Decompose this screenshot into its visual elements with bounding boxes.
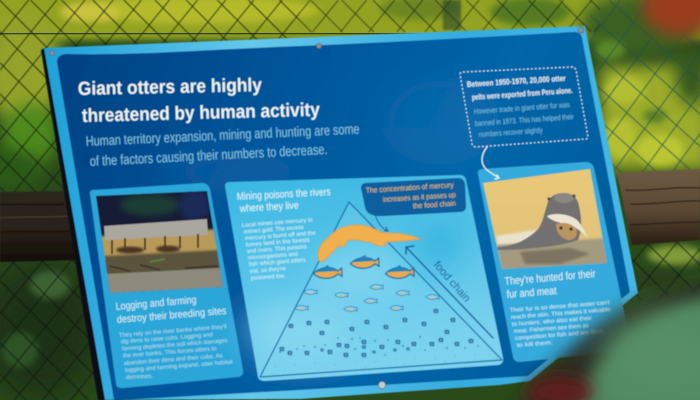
panel body text: mercury is burnt off and the <box>245 230 316 242</box>
panel body text: poisoned too. <box>251 273 286 282</box>
label: food chain: food chain <box>431 259 473 305</box>
callout: dotted fact box: numbers recover slightly <box>479 126 543 139</box>
subtitle: Human territory expansion, mining and hunting are some <box>85 121 360 149</box>
panel heading <box>237 186 331 215</box>
arrow: callout to otter <box>375 212 388 231</box>
panel body text: abandon their dens and their cubs. As <box>124 353 223 367</box>
panel heading: They're hunted for their <box>504 268 596 288</box>
foreground: blurred green leaf, bottom right <box>515 280 700 400</box>
title: Giant otters are highly <box>78 75 262 100</box>
panel heading: destroy their breeding sites <box>116 305 227 326</box>
panel body text: Local mines use mercury to <box>242 217 313 229</box>
callout: mercury concentration <box>361 178 466 216</box>
small fish and organisms <box>274 309 491 371</box>
wooden log rail: left <box>0 191 78 262</box>
panel heading: where they live <box>239 199 299 215</box>
callout: dotted fact box: However trade in giant otter fur was <box>473 100 570 116</box>
panel body text: and rivers. This poisons <box>247 244 307 255</box>
title: threatened by human activity <box>82 100 320 127</box>
information sign <box>41 26 638 400</box>
sign inner blue field <box>57 32 630 400</box>
panel body text <box>242 217 316 282</box>
panel heading <box>115 294 227 326</box>
otter on top of pyramid <box>318 225 421 262</box>
panel: hunted for fur and meat <box>478 162 632 362</box>
panel body text: fish which giant otters <box>249 258 306 268</box>
sign field lighting <box>160 75 500 192</box>
panel body text: decreases. <box>126 374 153 381</box>
sign outer border <box>44 26 638 400</box>
foreground: blurred red leaf, top right <box>642 0 700 36</box>
panel heading: Mining poisons the rivers <box>237 186 331 203</box>
panel body text: meat. Fishermen see them as <box>514 323 589 335</box>
panel body text <box>510 300 611 349</box>
photo: river bank shelter <box>96 190 224 294</box>
food chain pyramid <box>260 202 502 377</box>
panel body text: reach the skin. This makes it valuable <box>511 307 611 321</box>
sign black edge <box>41 47 108 400</box>
panel body text: Their fur is so dense that water can't <box>510 300 610 314</box>
panel body text <box>119 324 233 381</box>
subtitle: of the factors causing their numbers to decrease. <box>89 141 328 169</box>
callout: dotted fact box <box>460 67 588 147</box>
panel body text: to kill them. <box>517 340 554 349</box>
sign screws <box>49 27 584 389</box>
arrow: food chain <box>406 246 493 338</box>
callout: mercury concentration: the food chain <box>413 199 456 210</box>
wooden log rail: right <box>617 169 700 245</box>
callout: dotted fact box: banned in 1973. This has helped their <box>475 112 574 128</box>
callout: mercury concentration: The concentration of mercury <box>366 180 454 195</box>
title <box>78 75 320 127</box>
medium fish <box>295 285 439 311</box>
panel body text: microorganisms and <box>248 252 298 261</box>
panel body text: extract gold. The excess <box>244 225 304 235</box>
panel body text: eat, so they're <box>250 266 286 275</box>
panel body text: to hunters, who also eat their <box>512 316 592 328</box>
panel: logging and farming <box>90 183 243 388</box>
subtitle <box>85 121 360 169</box>
panel body text: dig dens to raise cubs. Logging and <box>121 332 213 345</box>
panel heading: Logging and farming <box>115 294 197 313</box>
panel body text: logging and farming expand, otter habitat <box>125 360 233 374</box>
callout: dotted fact box: Between 1950-1970, 20,000 otter <box>467 74 566 89</box>
panel body text: farming depletes the soil which damages <box>122 338 228 352</box>
panel body text: the river banks. This forces otters to <box>123 346 217 359</box>
panel body text: fumes land in the forests <box>246 237 310 248</box>
panel body text: They rely on the river banks where they'll <box>119 324 227 339</box>
photo: otter eating a fish <box>482 168 608 270</box>
panel heading <box>504 268 596 301</box>
large fish <box>313 254 414 279</box>
arrow: fact box to otter photo <box>482 147 499 179</box>
panel: mining and food chain <box>225 175 503 381</box>
panel heading: fur and meat <box>506 285 557 301</box>
callout: mercury concentration: increases as it passes up <box>383 190 456 204</box>
panel body text: competition for fish and are likely <box>515 329 605 342</box>
callout: dotted fact box: pelts were exported from Peru alone. <box>472 86 573 102</box>
